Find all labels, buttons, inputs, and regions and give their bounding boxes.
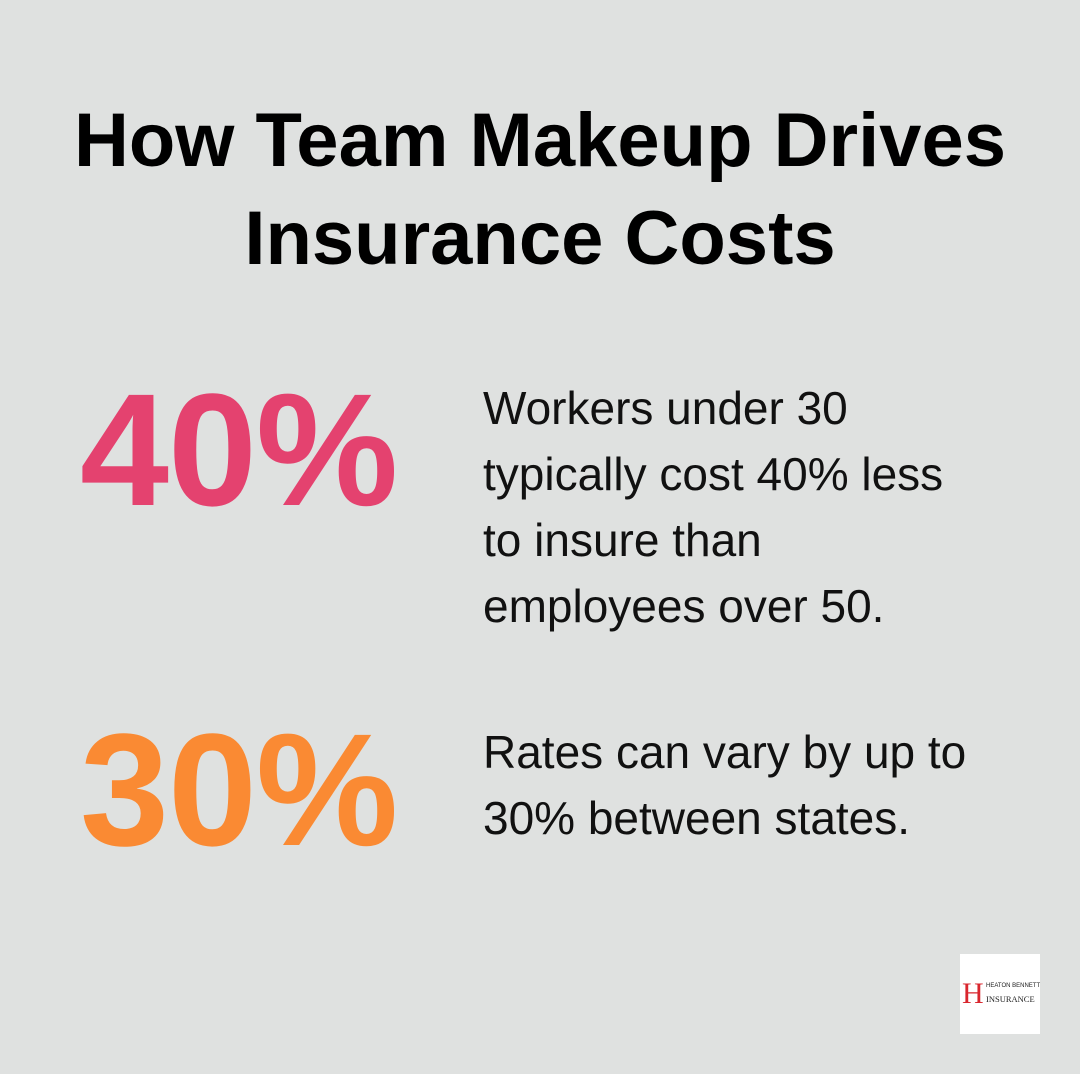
stat: 40%: 40%: [80, 360, 397, 539]
text: 30% description: [483, 726, 966, 844]
text: 30% description: Rates can vary by up to: [483, 726, 966, 778]
text: 40% description: [483, 382, 943, 632]
stat: 30%: 30%: [80, 700, 397, 879]
logo: [960, 954, 1040, 1034]
text: 30% description: 30% between states.: [483, 792, 910, 844]
logo: HEATON BENNETT: [986, 983, 1040, 989]
text: 40% description: to insure than: [483, 514, 762, 566]
text: 40% description: Workers under 30: [483, 382, 848, 434]
text: 40% description: employees over 50.: [483, 580, 884, 632]
logo: INSURANCE: [986, 994, 1035, 1004]
logo: H: [962, 977, 984, 1010]
text: 40% description: typically cost 40% less: [483, 448, 943, 500]
title: [74, 98, 1006, 281]
title: How Team Makeup Drives: [74, 98, 1006, 183]
title: Insurance Costs: [244, 196, 836, 281]
